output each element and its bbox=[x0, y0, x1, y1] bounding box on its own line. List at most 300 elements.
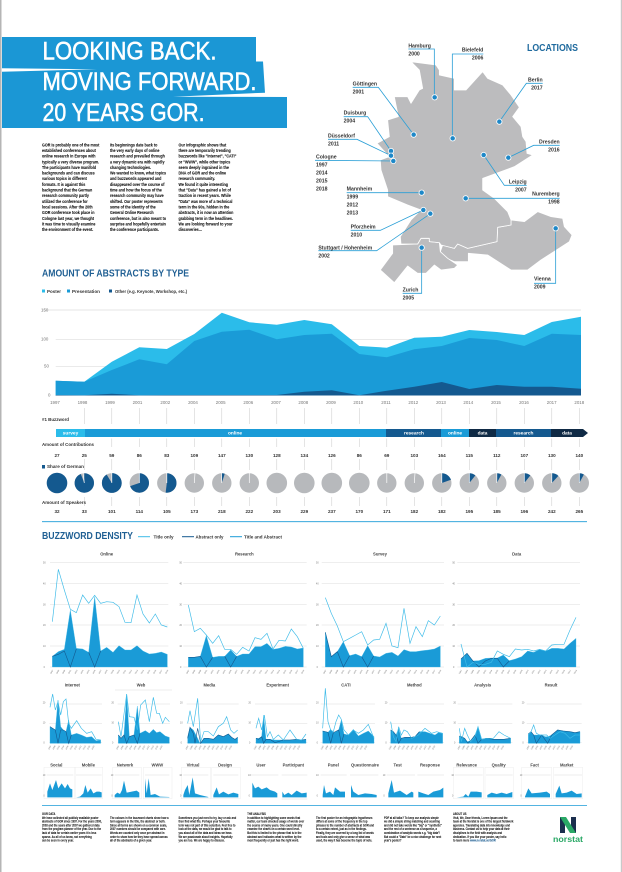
chart: Media: 20 bbox=[180, 703, 183, 705]
chart: Survey: 2013 bbox=[408, 669, 412, 675]
chart: Survey: 2015 bbox=[420, 669, 425, 675]
text block: intro column 3: that "Data" has gained a lot of bbox=[178, 187, 231, 193]
chart: Media: 1997 bbox=[186, 745, 190, 750]
numbers: contributions per year: 86 bbox=[137, 453, 142, 458]
title: LOOKING BACK. bbox=[42, 37, 216, 65]
chart: Method: 2006 bbox=[406, 745, 411, 750]
chart: Survey: 2017 bbox=[432, 670, 436, 675]
text block: intro column 3: or "WWW", while other topics bbox=[178, 159, 231, 164]
small chart: Quality bbox=[485, 763, 513, 799]
numbers: speakers per year: 237 bbox=[328, 509, 336, 514]
chart: Research: 40 bbox=[179, 583, 183, 585]
chart: Web: 2004 bbox=[129, 745, 134, 750]
small chart: Quality: Quality bbox=[492, 763, 506, 768]
small chart: Test bbox=[383, 763, 415, 798]
footer text: column 5: The first poster for an infographic hypotheses bbox=[316, 815, 373, 820]
timeline: number one buzzword: online bbox=[448, 431, 462, 437]
chart: Research: Research bbox=[235, 552, 254, 557]
location: Vienna: Vienna bbox=[534, 276, 551, 282]
location: Mannheim: 2012 bbox=[347, 202, 358, 208]
legend: buzzword density: Abstract only bbox=[196, 534, 224, 540]
chart: Data: Data bbox=[512, 552, 522, 557]
chart: Analysis: 0 bbox=[454, 743, 456, 745]
chart: Survey: 1997 bbox=[323, 670, 327, 675]
footer text: column 1: from the program planner of the year. Due to the bbox=[42, 827, 101, 831]
numbers: contributions per year: 69 bbox=[384, 453, 390, 458]
chart: Internet: 2008 bbox=[70, 745, 74, 750]
chart: Data: 2011 bbox=[532, 670, 536, 675]
small chart: Panel: 0 bbox=[317, 796, 319, 798]
chart: Online: 2016 bbox=[153, 669, 158, 675]
x axis labels: 2014 bbox=[463, 400, 474, 405]
numbers: contributions per year: 59 bbox=[109, 453, 115, 458]
chart: Method: 2002 bbox=[398, 745, 402, 750]
chart: Media: 2002 bbox=[194, 745, 198, 750]
x axis labels: 2004 bbox=[188, 400, 198, 405]
chart: Internet: 1997 bbox=[48, 745, 52, 750]
numbers: speakers per year: 182 bbox=[410, 509, 419, 514]
location: Vienna: 2009 bbox=[534, 284, 546, 290]
chart: Web: 1997 bbox=[116, 745, 120, 750]
text block: intro column 3: seem deeply ingrained in the bbox=[178, 164, 230, 170]
chart: Survey: 2010 bbox=[390, 669, 394, 675]
chart: Data: 50 bbox=[452, 562, 456, 564]
chart: Method: 2018 bbox=[432, 745, 437, 750]
chart: Data: 20 bbox=[452, 625, 456, 627]
footer text: column 4: THE ANALYSIS bbox=[247, 812, 266, 816]
legend: abstract types bbox=[42, 289, 187, 294]
chart: Data: 2009 bbox=[520, 669, 524, 675]
small chart: User: 0 bbox=[249, 796, 251, 798]
text block: intro column 1: the environment of the event. bbox=[42, 227, 93, 232]
chart: Research: 2014 bbox=[277, 669, 281, 675]
footer text: column 6: we did a simple string matching and counting bbox=[383, 819, 440, 824]
chart: Research: 2013 bbox=[271, 669, 275, 675]
y axis labels bbox=[41, 308, 51, 398]
chart: Online: 2013 bbox=[135, 669, 139, 675]
small chart: Participant: Participant bbox=[283, 763, 305, 768]
label: share of German: Share of German bbox=[47, 464, 84, 469]
chart: Web: 2016 bbox=[155, 745, 160, 750]
footer text: column 2: 2007 numbers should be compared with care. bbox=[110, 827, 166, 831]
timeline: number one buzzword: data bbox=[478, 431, 488, 437]
footer text: column 2 bbox=[110, 815, 169, 843]
chart: Data: 2005 bbox=[495, 669, 500, 675]
chart: Experiment: 2016 bbox=[293, 745, 297, 750]
location: Hamburg: 2000 bbox=[408, 51, 420, 57]
chart: Online: 2007 bbox=[99, 670, 103, 675]
legend: abstract types: Other (e.g. Keynote, Workshop, etc.) bbox=[115, 289, 187, 294]
chart: Analysis: 2018 bbox=[501, 745, 505, 750]
title: MOVING FORWARD. bbox=[42, 68, 256, 96]
chart: Internet bbox=[43, 683, 102, 750]
text block: intro column 3: abstracts, it is now an attention bbox=[178, 210, 234, 215]
small chart: WWW: WWW bbox=[151, 763, 163, 768]
small chart: Mobile: Mobile bbox=[82, 763, 96, 768]
small chart: Mobile bbox=[75, 763, 103, 799]
small chart: User bbox=[248, 763, 278, 798]
chart: Internet: 10 bbox=[43, 723, 46, 725]
footer text: column 1: 2003 and the years after 2007 we gathered data bbox=[42, 823, 100, 828]
chart: Method: 10 bbox=[385, 723, 388, 725]
chart: Analysis: 2010 bbox=[484, 745, 488, 750]
chart: Method: 2012 bbox=[419, 745, 423, 750]
chart: Online: 2010 bbox=[117, 669, 121, 675]
footer text: column 1: can be seen in every year. bbox=[42, 838, 74, 843]
legend: buzzword density: Title only bbox=[154, 534, 174, 540]
footer text: column 1: GOR DATA bbox=[42, 812, 56, 816]
location: Hamburg bbox=[408, 44, 437, 100]
x axis labels: 2002 bbox=[160, 400, 171, 405]
small chart: Design: Design bbox=[218, 763, 232, 768]
chart: Experiment: 2002 bbox=[263, 745, 267, 750]
y axis labels: 150 bbox=[41, 308, 49, 312]
chart: CATI: 2008 bbox=[343, 745, 347, 750]
chart: Internet: 2018 bbox=[92, 745, 96, 750]
text block: intro column 1: local sessions. After the 20th bbox=[42, 204, 93, 210]
timeline: number one buzzword: research bbox=[404, 431, 424, 437]
footer text: column 7: disciplines to the field with analysis and bbox=[453, 831, 502, 835]
timeline: number one buzzword bbox=[56, 429, 588, 437]
x axis labels bbox=[50, 400, 585, 405]
chart: Experiment: 1997 bbox=[254, 745, 258, 750]
chart: Experiment: 2006 bbox=[271, 745, 276, 750]
chart: Online: 40 bbox=[43, 583, 46, 585]
small chart: Virtual bbox=[179, 763, 211, 799]
chart: Result: 2008 bbox=[548, 745, 553, 750]
chart: Internet: 2010 bbox=[74, 745, 79, 750]
small chart: Relevance: 10 bbox=[451, 775, 455, 777]
location: Mannheim: Mannheim bbox=[347, 187, 373, 193]
text block: intro column 2: shifted. Our poster represents bbox=[110, 198, 163, 204]
chart: Research: 2004 bbox=[217, 669, 221, 675]
chart: Research: 2002 bbox=[211, 670, 215, 675]
location: Hamburg: Hamburg bbox=[408, 44, 431, 50]
footer text: column 6: and did not take words like "big" or "synthetic" bbox=[384, 823, 442, 828]
chart: Data: 2006 bbox=[501, 669, 506, 675]
chart: Media: 2012 bbox=[216, 745, 220, 750]
chart: Method: 2016 bbox=[428, 745, 432, 750]
chart: Result: 10 bbox=[522, 723, 525, 725]
text block: intro column 3: We are looking forward to your bbox=[178, 221, 233, 227]
small chart: Response: Response bbox=[420, 763, 441, 768]
chart: Online: 1999 bbox=[62, 669, 67, 675]
chart: Method: Method bbox=[407, 683, 422, 688]
numbers: contributions per year: 27 bbox=[54, 453, 60, 458]
chart: Data: 2010 bbox=[526, 669, 530, 675]
text block: intro column 1: various topics in different bbox=[42, 176, 87, 181]
chart: Survey: 2002 bbox=[348, 670, 352, 675]
footer text: column 7: dedication. If you like your poster, say hello bbox=[453, 834, 507, 839]
chart: Data: 2008 bbox=[513, 669, 518, 675]
chart: Survey: 2004 bbox=[354, 669, 358, 675]
location: Leipzig: Leipzig bbox=[509, 179, 527, 185]
numbers: speakers per year: 170 bbox=[355, 509, 364, 514]
small chart: WWW bbox=[143, 763, 172, 799]
text block: intro column 1: formats. It is against this bbox=[42, 181, 86, 187]
chart: Method bbox=[385, 683, 444, 750]
footer text: column 3 bbox=[178, 815, 236, 843]
chart: Online: 2008 bbox=[105, 669, 109, 675]
chart: Survey: 2008 bbox=[378, 669, 382, 675]
text block: intro column 3: grabbing term in the headlines. bbox=[178, 215, 233, 221]
small chart: Fact bbox=[520, 763, 552, 799]
footer text: column 1 bbox=[42, 812, 102, 843]
chart: Experiment: 10 bbox=[248, 723, 252, 725]
small chart: Market bbox=[553, 763, 583, 799]
timeline tick lines bbox=[84, 408, 579, 506]
small chart: Social bbox=[43, 763, 75, 799]
chart: Experiment: 20 bbox=[248, 703, 252, 705]
chart: Result: 2002 bbox=[535, 745, 539, 750]
chart: Online: 2017 bbox=[159, 670, 163, 675]
chart: Research: 2017 bbox=[295, 670, 299, 675]
text block: intro column 3: Our infographic shows that bbox=[178, 142, 227, 147]
chart: Media bbox=[180, 683, 239, 750]
chart: Online: 1997 bbox=[50, 670, 54, 675]
chart: Data: 40 bbox=[452, 583, 456, 585]
footer text: column 6 bbox=[383, 815, 442, 843]
chart: Online: 0 bbox=[44, 667, 46, 669]
chart: Analysis bbox=[453, 683, 512, 750]
x axis labels: 1998 bbox=[78, 400, 88, 405]
chart: Experiment: 2010 bbox=[280, 745, 284, 750]
location: Vienna bbox=[534, 226, 558, 290]
chart: CATI: 10 bbox=[316, 723, 319, 725]
heading: buzzword density: BUZZWORD DENSITY bbox=[42, 531, 133, 542]
chart: Web: 2018 bbox=[160, 745, 164, 750]
chart: Web: 2014 bbox=[151, 745, 155, 750]
chart: Web: 0 bbox=[112, 743, 114, 745]
chart: Result: 20 bbox=[522, 703, 525, 705]
location: Mannheim bbox=[347, 187, 424, 216]
footer text: column 3: you about all of the data and ideas we have. bbox=[178, 831, 232, 835]
location: Duisburg: Duisburg bbox=[344, 111, 366, 117]
text block: intro column 1: established conferences about bbox=[42, 148, 96, 153]
footer text: column 7: team at the Norstat is one of the largest fieldwork bbox=[453, 819, 514, 824]
chart: Research: 20 bbox=[179, 625, 183, 627]
chart: Online: 2002 bbox=[75, 670, 79, 675]
chart: Web: 2002 bbox=[125, 745, 129, 750]
small chart: Test: Test bbox=[394, 763, 402, 768]
label: #1 buzzword: #1 Buzzword bbox=[42, 417, 69, 422]
chart: Method: 1999 bbox=[393, 745, 398, 750]
location: Duisburg: 2004 bbox=[344, 119, 355, 125]
numbers: contributions per year: 126 bbox=[328, 453, 336, 458]
text block: intro column 2: time and how the focus of the bbox=[110, 187, 162, 193]
text block: intro column 3: buzzwords like "Internet", "CATI" bbox=[178, 153, 236, 159]
text block: intro column 2: research and prevailed through bbox=[110, 153, 165, 159]
small chart: User: 10 bbox=[248, 775, 251, 777]
footer text: column 4: most frequently or just has the right word. bbox=[247, 838, 299, 843]
location: Cologne bbox=[315, 155, 396, 193]
footer text: column 3: term was not part of this selection. Feel free to bbox=[178, 823, 236, 828]
location: Düsseldorf: Düsseldorf bbox=[328, 133, 355, 139]
chart: Media: 2004 bbox=[199, 745, 203, 750]
numbers: speakers per year: 105 bbox=[163, 509, 171, 514]
numbers: contributions per year: 147 bbox=[218, 453, 226, 458]
footer text: column 3: you are too. We are happy to discuss. bbox=[178, 838, 225, 843]
location: Dresden: 2016 bbox=[548, 147, 560, 153]
chart: Research: 2007 bbox=[235, 670, 239, 675]
numbers: contributions per year: 112 bbox=[493, 453, 501, 458]
footer text: column 6: PDF at all talks? To keep our analysis simple bbox=[384, 815, 439, 820]
chart: CATI: 2014 bbox=[356, 745, 360, 750]
chart: Survey: 2007 bbox=[372, 670, 376, 675]
x axis labels: 2017 bbox=[547, 400, 557, 405]
location: Bielefeld: 2006 bbox=[472, 55, 483, 61]
footer text: column 7: agencies. Translating data into knowledge and bbox=[453, 823, 510, 828]
chart: Result: 2006 bbox=[544, 745, 548, 750]
text block: intro column 3: We found it quite interesting bbox=[178, 181, 228, 187]
location: Zurich bbox=[403, 245, 424, 301]
chart: Research: 1997 bbox=[186, 670, 190, 675]
chart: Media: 2018 bbox=[229, 745, 233, 750]
numbers: speakers per year: 218 bbox=[218, 509, 226, 514]
title: 20 YEARS GOR. bbox=[42, 99, 204, 127]
numbers: contributions per year: 130 bbox=[548, 453, 556, 458]
chart: Result: 2016 bbox=[566, 745, 570, 750]
chart: Survey: 50 bbox=[316, 562, 319, 564]
chart: Survey: 2005 bbox=[360, 669, 364, 675]
footer text: column 4: the course of many years. One could directly bbox=[247, 823, 303, 828]
chart: Experiment: 2008 bbox=[276, 745, 280, 750]
location: Cologne: 2015 bbox=[316, 179, 328, 185]
chart: Analysis: Analysis bbox=[474, 683, 492, 688]
x axis labels: 2013 bbox=[436, 400, 446, 405]
chart: Result: 1997 bbox=[527, 745, 531, 750]
chart: Survey: 2001 bbox=[341, 670, 345, 675]
location: Pforzheim bbox=[351, 207, 426, 238]
text block: intro column 3: discoveries... bbox=[178, 227, 202, 232]
chart: Internet: 1999 bbox=[53, 745, 57, 750]
chart: CATI: 2016 bbox=[360, 745, 364, 750]
location: Bielefeld: Bielefeld bbox=[462, 48, 483, 54]
chart: Web: 2008 bbox=[138, 745, 142, 750]
chart: Analysis: 2014 bbox=[492, 745, 497, 750]
small chart: Fact: 10 bbox=[520, 775, 523, 777]
timeline: number one buzzword: data bbox=[562, 431, 572, 437]
logo: norstat bbox=[553, 817, 583, 844]
chart: Method: 0 bbox=[385, 743, 387, 745]
footer text: column 6: and the rest of a sentence as a sequence, a bbox=[384, 827, 437, 831]
chart: Survey: 1999 bbox=[335, 669, 340, 675]
small chart: Panel bbox=[316, 763, 347, 798]
location: Mannheim: 2013 bbox=[347, 210, 358, 216]
numbers: speakers per year: 229 bbox=[300, 509, 309, 514]
chart: Survey: 2009 bbox=[384, 669, 388, 675]
x axis labels: 1997 bbox=[50, 400, 60, 405]
text block: intro column 2: a very dynamic era with rapidly bbox=[110, 159, 165, 164]
numbers: speakers per year: 32 bbox=[54, 509, 60, 514]
numbers: speakers per year: 203 bbox=[273, 509, 281, 514]
chart: Web bbox=[111, 683, 172, 750]
footer text: column 5: used, the way it has become the topic of note. bbox=[316, 838, 372, 843]
chart: CATI: 0 bbox=[317, 743, 319, 745]
footer text: column 4 bbox=[247, 812, 305, 843]
x axis labels: 2001 bbox=[133, 400, 143, 405]
chart: Survey: 20 bbox=[316, 625, 319, 627]
chart: Result: 2012 bbox=[557, 745, 561, 750]
chart: Data: 2015 bbox=[556, 669, 560, 675]
chart: Online: 2009 bbox=[111, 669, 115, 675]
location: Duisburg bbox=[344, 111, 394, 154]
chart: CATI: 2006 bbox=[338, 745, 343, 750]
chart: Media: 2016 bbox=[225, 745, 229, 750]
footer text: column 1: abstracts of GOR since 1997. For the years 2000, bbox=[42, 819, 102, 824]
text block: intro column 2: the conference participants. bbox=[110, 227, 159, 232]
chart: Analysis: 2008 bbox=[479, 745, 484, 750]
chart: Data: 2001 bbox=[477, 670, 481, 675]
chart: Survey: Survey bbox=[373, 552, 388, 557]
chart: Data: 2013 bbox=[544, 669, 548, 675]
chart: Result bbox=[522, 683, 582, 750]
chart: Internet: 2014 bbox=[83, 745, 87, 750]
location: Stuttgart / Hohenheim: 2002 bbox=[318, 253, 330, 259]
location: Düsseldorf: 2011 bbox=[328, 141, 339, 147]
small chart: Network: 0 bbox=[111, 796, 113, 798]
location: Pforzheim: 2010 bbox=[351, 232, 362, 238]
numbers: speakers per year bbox=[54, 509, 584, 514]
heading: locations: LOCATIONS bbox=[527, 43, 578, 54]
small chart: Relevance: Relevance bbox=[456, 763, 478, 768]
chart: Data bbox=[452, 552, 580, 675]
chart: Web: 20 bbox=[111, 703, 115, 705]
chart: Method: 20 bbox=[385, 703, 388, 705]
chart: Research: 2012 bbox=[265, 670, 269, 675]
x axis labels: 2018 bbox=[574, 400, 585, 405]
text block: intro column 1: online research in Europe with bbox=[42, 153, 96, 159]
location: Leipzig bbox=[481, 152, 527, 193]
label: amount of contributions: Amount of Contributions bbox=[42, 442, 94, 447]
footer text: column 7 bbox=[453, 812, 514, 843]
text block: intro column 2: and buzzwords appeared and bbox=[110, 176, 162, 181]
chart: Online: 2014 bbox=[141, 669, 145, 675]
label: amount of speakers: Amount of Speakers bbox=[42, 500, 86, 505]
legend: buzzword density: Title and Abstract bbox=[244, 534, 282, 540]
text block: intro column 2: research community may have bbox=[110, 193, 164, 198]
chart: Online: 2015 bbox=[147, 669, 152, 675]
location: Berlin: 2017 bbox=[531, 86, 543, 92]
chart: Experiment: 2012 bbox=[284, 745, 288, 750]
x axis labels: 2011 bbox=[381, 400, 391, 405]
footer text: column 7: Visit, We, Dear friends, Lorem Ipsum and the bbox=[453, 815, 508, 820]
chart: Online: 2001 bbox=[68, 670, 72, 675]
chart: Web: Web bbox=[137, 683, 146, 688]
chart: Result: 2014 bbox=[561, 745, 566, 750]
chart: Research: 0 bbox=[180, 667, 182, 669]
numbers: contributions per year: 107 bbox=[520, 453, 529, 458]
chart: Survey: 30 bbox=[316, 604, 319, 606]
chart: Research: 50 bbox=[179, 562, 183, 564]
footer text: column 2: term appears in the title, the abstract or both. bbox=[110, 819, 166, 824]
text block: intro column 3: there are temporarily trending bbox=[178, 148, 231, 153]
small chart: Participant bbox=[282, 763, 307, 799]
chart: Web: 1999 bbox=[121, 745, 125, 750]
numbers: speakers per year: 242 bbox=[548, 509, 556, 514]
footer text: column 4: But this is limited to the phrase that is in the bbox=[247, 831, 302, 835]
footer text: column 3: Sometimes you just need to try, buy or ask and bbox=[178, 815, 236, 820]
chart: Data: 2014 bbox=[550, 669, 554, 675]
footer text: column 3: We are passionate about insights. Hopefully bbox=[178, 834, 233, 839]
footer text: column 6: But could a "Data" be a nice challenge for next bbox=[384, 834, 441, 839]
location: Nuremberg bbox=[463, 192, 560, 205]
chart: Method: 2010 bbox=[415, 745, 419, 750]
chart group: medium and small charts, right half bbox=[316, 683, 583, 799]
small chart: Panel: Panel bbox=[328, 763, 339, 768]
chart: Media: 2010 bbox=[212, 745, 216, 750]
chart: Survey: 2012 bbox=[402, 670, 406, 675]
